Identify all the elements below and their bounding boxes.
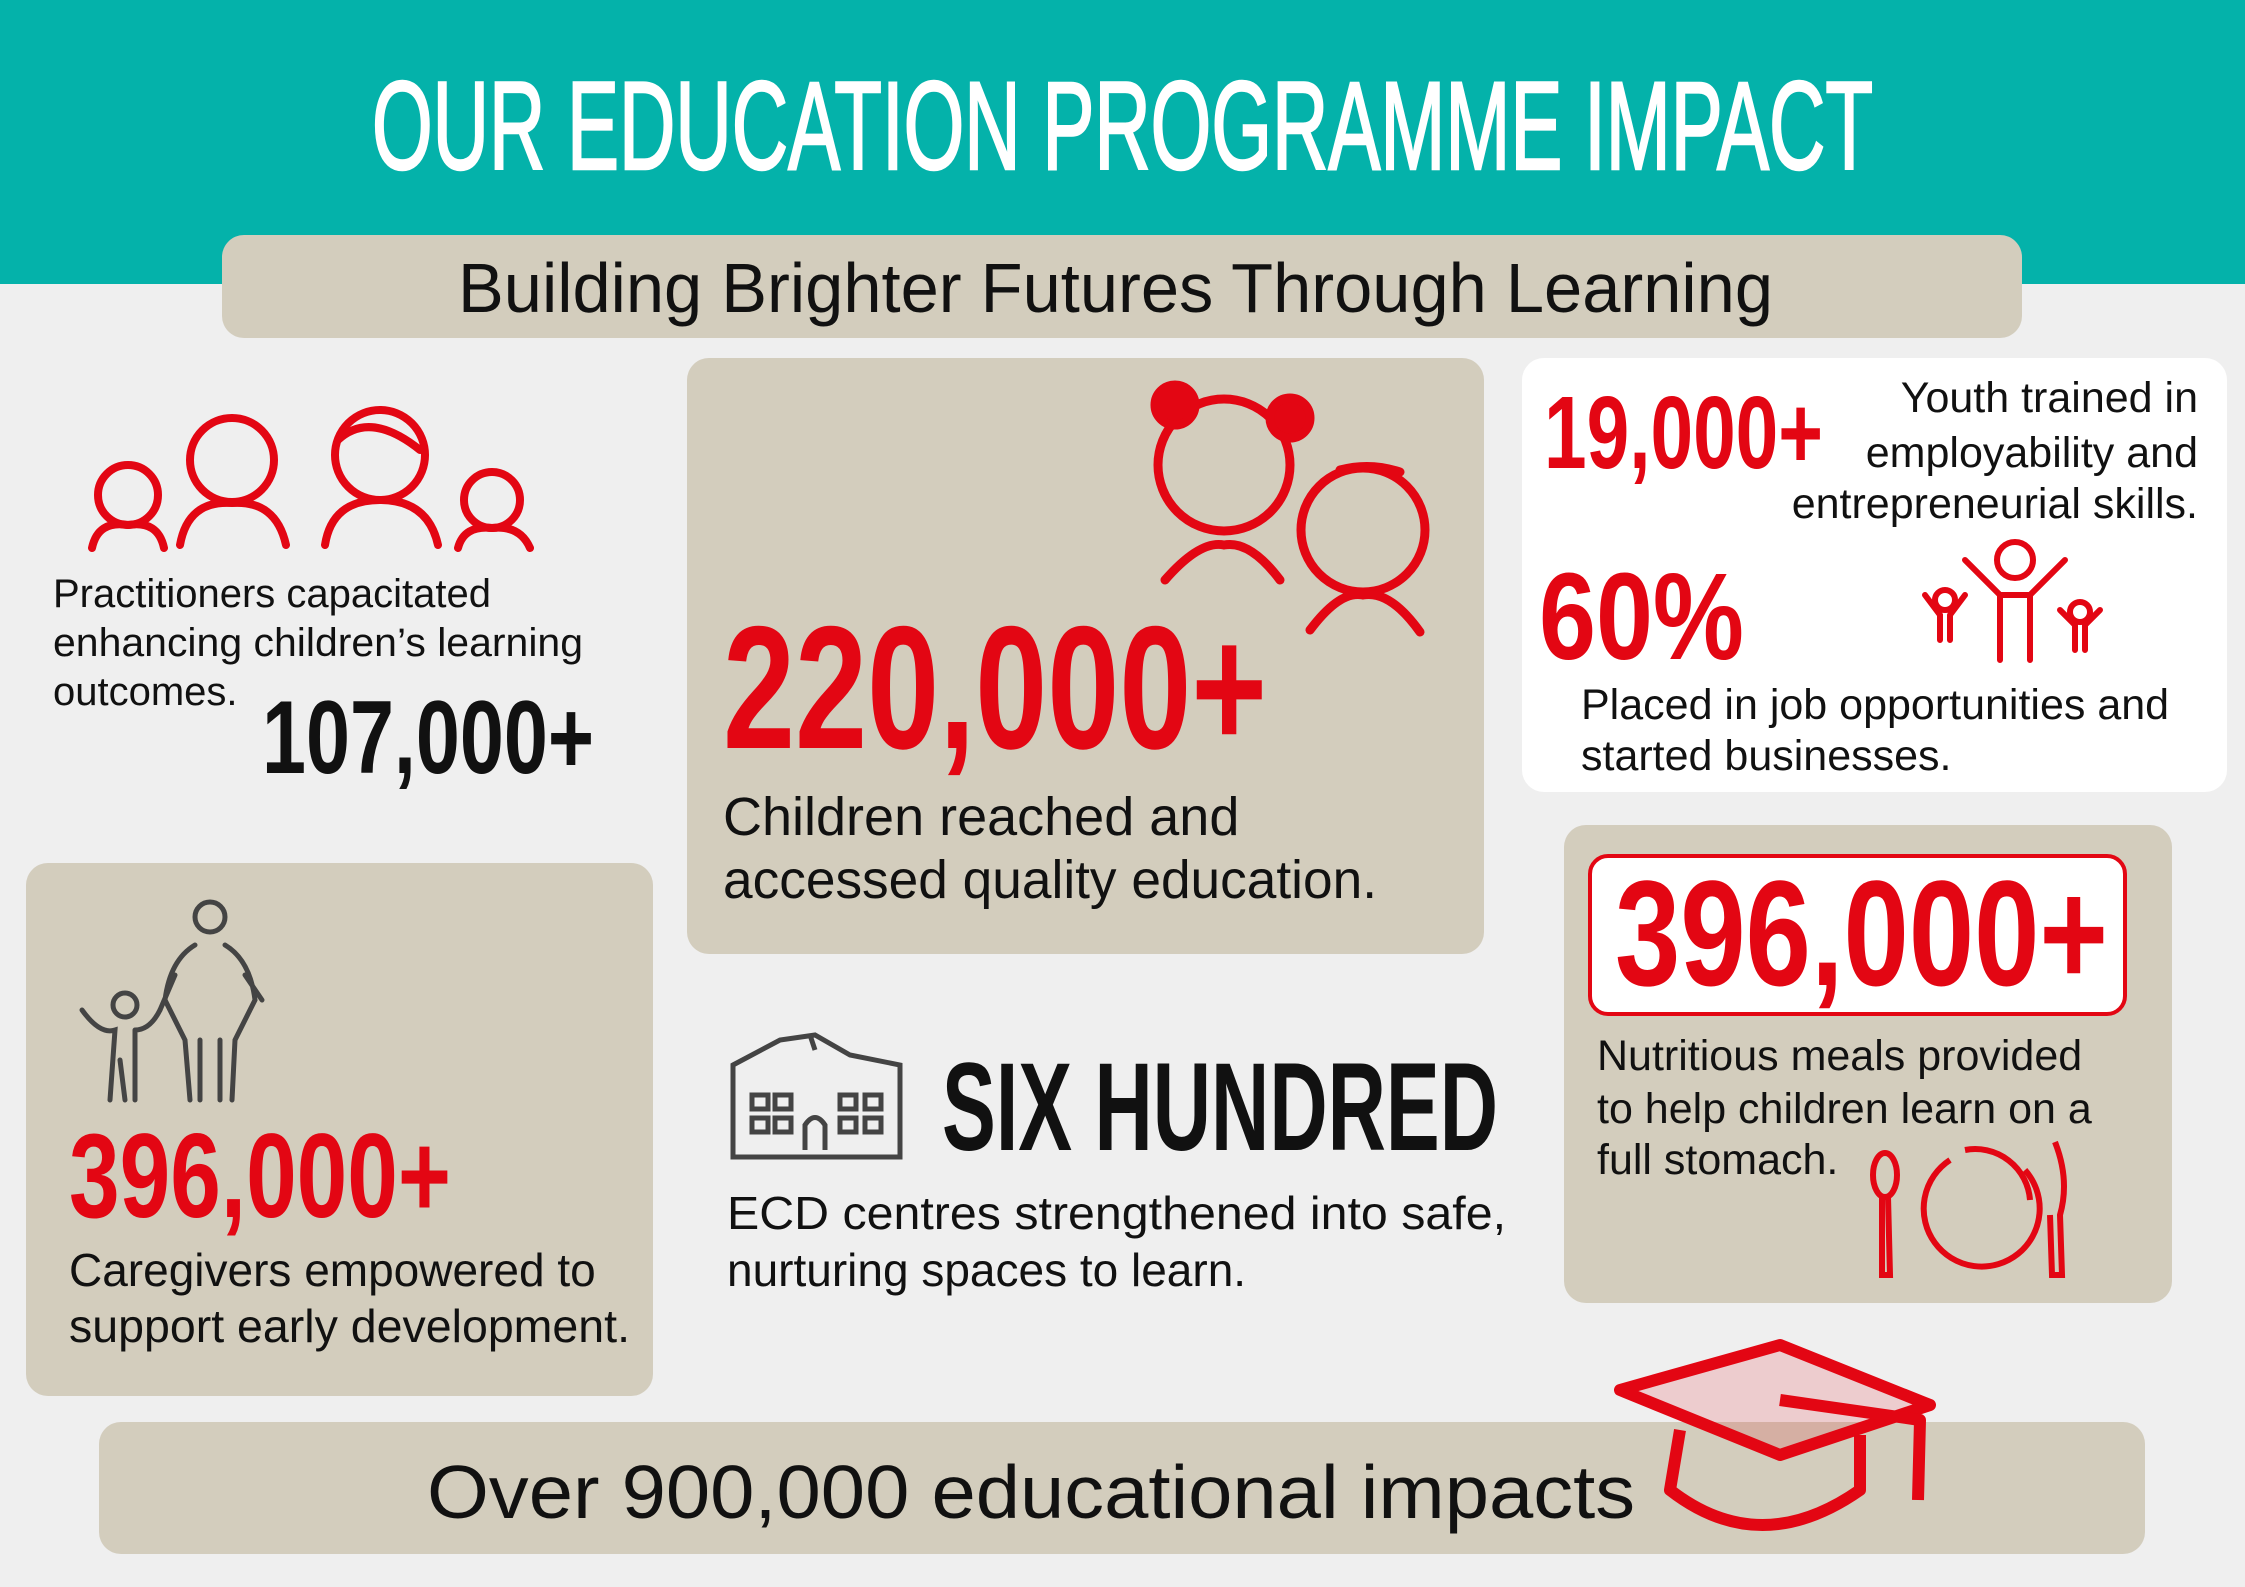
icon: family group: [92, 410, 530, 548]
number: 60%: 60%: [1539, 549, 1744, 686]
icon: parent and child: [82, 902, 262, 1100]
icon: cheering people: [1925, 542, 2100, 660]
panel: practitioners: [53, 410, 594, 796]
number: 396,000+ caregivers: 396,000+: [69, 1109, 451, 1243]
icon: plate and cutlery: [1873, 1142, 2064, 1275]
text: meals: Nutritious meals provided: [1597, 1032, 2082, 1080]
header band: [0, 0, 2245, 284]
subtitle bar: Building Brighter Futures Through Learning: [458, 249, 1773, 327]
panel: youth: [1522, 358, 2227, 792]
panel: children reached: [687, 358, 1484, 954]
subtitle bar: [222, 235, 2022, 338]
panel: ECD centres: [727, 1035, 1506, 1296]
number: 220,000+: 220,000+: [723, 591, 1267, 786]
text: children: accessed quality education.: [723, 850, 1377, 910]
number: 107,000+: 107,000+: [262, 680, 594, 796]
text: practitioners: outcomes.: [53, 670, 238, 714]
text: youth: entrepreneurial skills.: [1792, 480, 2198, 528]
text: caregivers: Caregivers empowered to: [69, 1244, 596, 1296]
number: 19,000+: 19,000+: [1544, 375, 1823, 490]
bottom bar: Over 900,000 educational impacts: [427, 1450, 1635, 1534]
text: ECD: nurturing spaces to learn.: [727, 1244, 1246, 1296]
text: youth: employability and: [1866, 429, 2198, 477]
text: caregivers: support early development.: [69, 1300, 630, 1352]
text: placed: started businesses.: [1581, 732, 1951, 780]
panel: meals: [1564, 825, 2172, 1303]
icon: children: [1155, 385, 1425, 632]
heading: six hundred: SIX HUNDRED: [942, 1038, 1498, 1177]
text: children: Children reached and: [723, 787, 1239, 847]
icon: graduation cap: [1620, 1345, 1930, 1525]
icon: school: [733, 1035, 900, 1157]
text: meals: full stomach.: [1597, 1136, 1838, 1184]
number box: 396,000+ meals: 396,000+: [1615, 849, 2108, 1017]
text: meals: to help children learn on a: [1597, 1085, 2092, 1133]
text: practitioners: enhancing children’s learning: [53, 621, 583, 665]
bottom bar: [99, 1422, 2145, 1554]
text: youth: Youth trained in: [1901, 374, 2198, 422]
text: practitioners: Practitioners capacitated: [53, 572, 491, 616]
text: placed: Placed in job opportunities and: [1581, 681, 2169, 729]
panel: caregivers: [26, 863, 653, 1396]
text: ECD: ECD centres strengthened into safe,: [727, 1187, 1506, 1239]
